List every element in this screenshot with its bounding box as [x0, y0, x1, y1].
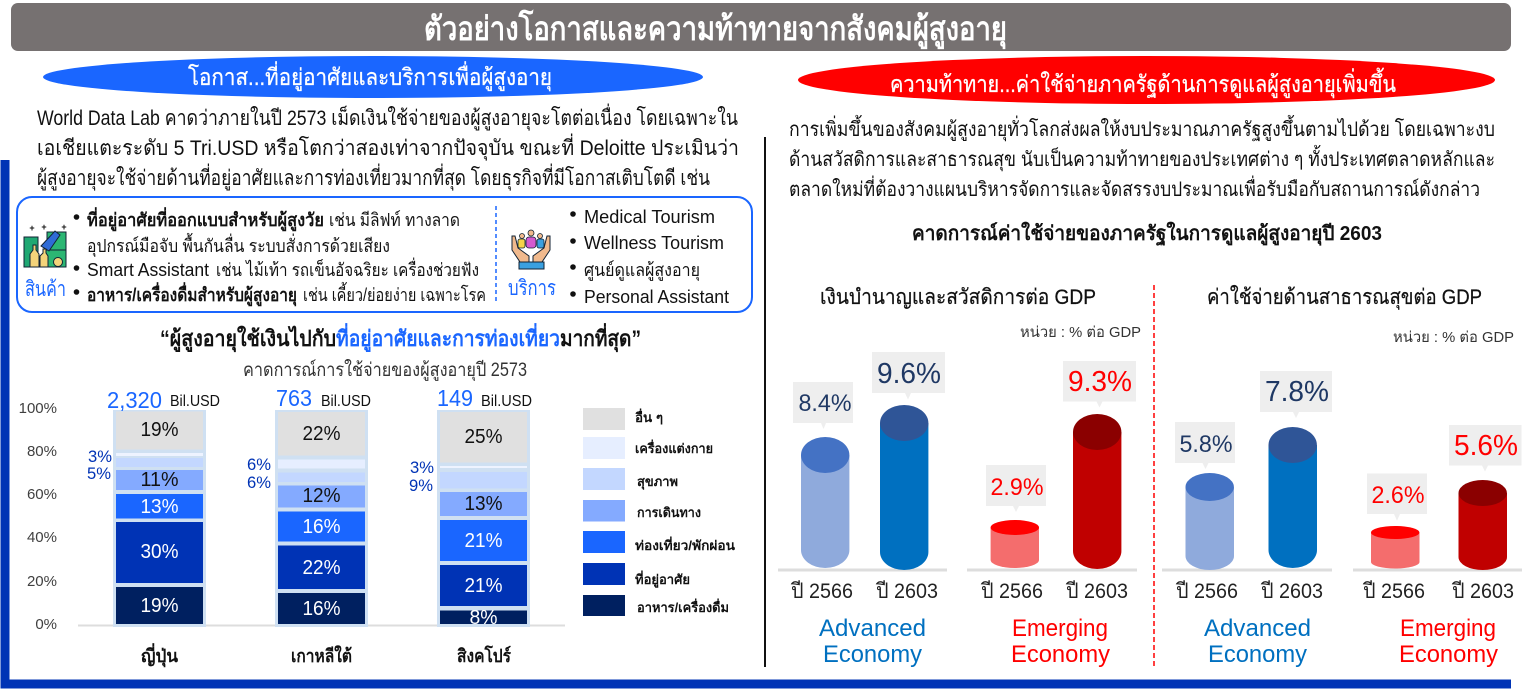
products and services box [17, 197, 752, 312]
y axis labels: 40% [27, 529, 57, 546]
opportunity paragraph: World Data Lab คาดว่าภายในปี 2573 เม็ดเงินใช้จ่ายของผู้สูงอายุจะโตต่อเนื่อง โดยเฉพาะใน [37, 103, 738, 131]
callout: 5.6%: 5.6% [1454, 430, 1518, 462]
icon: products: + [41, 222, 47, 232]
chart heading [160, 322, 641, 353]
market size labels: 2,320 [107, 387, 162, 413]
product list: เช่น ไม้เท้า รถเข็นอัจฉริยะ เครื่องช่วยฟัง [216, 257, 479, 280]
chart heading: “ผู้สูงอายุใช้เงินไปกับ [160, 325, 336, 353]
year labels: ปี 2566 [980, 580, 1043, 603]
legend: ที่อยู่อาศัย [635, 570, 690, 588]
market size labels: Bil.USD [481, 393, 532, 410]
year labels: ปี 2603 [1451, 580, 1514, 603]
panel: opportunity [17, 56, 752, 668]
stacked bar: Singapore: 13% [464, 493, 503, 515]
title bar [11, 3, 1511, 51]
chart heading: ที่อยู่อาศัยและการท่องเที่ยว [336, 322, 560, 353]
y axis labels [19, 400, 57, 633]
cylinder: Advanced 2566 health [1186, 473, 1234, 570]
market size labels: Bil.USD [170, 393, 220, 410]
economy labels: Emerging [1400, 615, 1496, 642]
chart heading: มากที่สุด” [560, 322, 641, 353]
legend: เครื่องแต่งกาย [635, 439, 713, 456]
service list [570, 207, 729, 307]
stacked bar: Singapore [437, 410, 530, 629]
cylinder: Advanced 2566 pension [801, 437, 849, 568]
callout: 5.6% [1449, 425, 1522, 472]
cylinder: Emerging 2603 pension [1073, 414, 1121, 569]
stacked bar: Japan: 13% [140, 496, 179, 518]
legend: อื่น ๆ [635, 408, 663, 425]
service list: Medical Tourism [584, 207, 715, 227]
callout: 9.3% [1063, 361, 1136, 408]
product list: เช่น มีลิฟท์ ทางลาด [329, 210, 460, 230]
stacked bar: Japan: 19% [140, 419, 179, 441]
cylinder: Emerging 2603 health [1458, 480, 1507, 570]
small side percentages [87, 447, 434, 495]
service list: Personal Assistant [584, 287, 729, 307]
stacked bar: Japan [113, 410, 206, 627]
unit note: pension: หน่วย : % ต่อ GDP [1020, 324, 1141, 341]
y axis labels: 60% [27, 486, 57, 503]
opportunity paragraph: ผู้สูงอายุจะใช้จ่ายด้านที่อยู่อาศัยและการท่องเที่ยวมากที่สุด โดยธุรกิจที่มีโอกาสเติบโตดี เช่น [37, 163, 710, 191]
country labels: ญี่ปุ่น [141, 643, 179, 668]
product list: อุปกรณ์มือจับ พื้นกันลื่น ระบบสั่งการด้วยเสียง [87, 233, 390, 257]
callout: 2.9% [986, 465, 1046, 512]
opportunity paragraph: เอเชียแตะระดับ 5 Tri.USD หรือโตกว่าสองเท่าจากปัจจุบัน ขณะที่ Deloitte ประเมินว่า [37, 133, 739, 161]
icon: products [24, 222, 67, 267]
market size labels: 763 [276, 385, 312, 411]
market size labels: 149 [437, 385, 473, 411]
economy labels [819, 615, 1498, 668]
legend [583, 408, 735, 616]
challenge paragraph [789, 115, 1495, 201]
legend: ท่องเที่ยว/พักผ่อน [635, 536, 735, 553]
service list: Wellness Tourism [584, 233, 724, 253]
callout: 9.6% [872, 352, 945, 400]
callout: 2.9%: 2.9% [990, 474, 1044, 501]
small side percentages: 3% [88, 447, 112, 466]
legend: การเดินทาง [637, 505, 701, 520]
label: services: บริการ [508, 277, 556, 300]
cylinder: Advanced 2603 pension [880, 405, 928, 570]
stacked bar: Japan: 30% [140, 541, 179, 563]
callout: 9.3%: 9.3% [1068, 366, 1132, 398]
stacked bar: Singapore: 8% [470, 607, 498, 629]
economy labels: Economy [1208, 641, 1307, 668]
product list: เช่น เคี้ยว/ย่อยง่าย เฉพาะโรค [303, 282, 486, 305]
year labels [790, 580, 1514, 603]
stacked bar: Korea: 22% [302, 423, 341, 445]
callout: 7.8% [1260, 371, 1332, 418]
stacked bar: Japan: 11% [140, 469, 179, 491]
title bar: ตัวอย่างโอกาสและความท้าทายจากสังคมผู้สูงอายุ [424, 9, 1007, 50]
callout: 9.6%: 9.6% [877, 358, 941, 390]
product list: ที่อยู่อาศัยที่ออกแบบสำหรับผู้สูงวัย [87, 207, 324, 232]
callout: 5.8% [1175, 422, 1235, 469]
economy labels: Emerging [1012, 615, 1108, 642]
small side percentages: 6% [247, 473, 271, 492]
heading: pension chart: เงินบำนาญและสวัสดิการต่อ GDP [820, 286, 1096, 309]
opportunity heading [43, 56, 703, 98]
country labels: สิงคโปร์ [457, 645, 511, 666]
product list [74, 207, 486, 307]
service list: ศูนย์ดูแลผู้สูงอายุ [584, 260, 700, 281]
y axis labels: 80% [27, 443, 57, 460]
legend: สุขภาพ [637, 474, 678, 490]
stacked bar: Korea: 16% [302, 598, 341, 620]
callout: 2.6%: 2.6% [1372, 482, 1424, 509]
icon: products: + [61, 222, 67, 232]
legend: อาหาร/เครื่องดื่ม [637, 598, 729, 615]
economy labels: Economy [1399, 641, 1498, 668]
country labels: เกาหลีใต้ [291, 645, 352, 666]
year labels: ปี 2566 [790, 580, 853, 603]
y axis labels: 100% [19, 400, 57, 417]
callout: 5.8%: 5.8% [1180, 431, 1232, 458]
challenge heading: ความท้าทาย...ค่าใช้จ่ายภาครัฐด้านการดูแลผู้สูงอายุเพิ่มขึ้น [890, 68, 1396, 98]
year labels: ปี 2566 [1175, 580, 1238, 603]
stacked bar: Korea: 12% [302, 485, 341, 507]
year labels: ปี 2566 [1362, 580, 1425, 603]
label: products: สินค้า [25, 278, 66, 301]
opportunity heading: โอกาส...ที่อยู่อาศัยและบริการเพื่อผู้สูงอายุ [188, 61, 552, 91]
stacked bar: Japan: 19% [140, 595, 179, 617]
panel: challenge [778, 56, 1522, 668]
blue frame of left panel [5, 160, 1511, 684]
callout: 8.4% [793, 382, 853, 429]
market size labels [107, 385, 532, 413]
chart subtitle: คาดการณ์การใช้จ่ายของผู้สูงอายุปี 2573 [243, 359, 527, 382]
small side percentages: 3% [410, 458, 434, 477]
product list: Smart Assistant [87, 260, 209, 280]
y axis labels: 20% [27, 573, 57, 590]
y axis labels: 0% [35, 616, 57, 633]
economy labels: Advanced [1204, 615, 1311, 642]
year labels: ปี 2603 [1065, 580, 1128, 603]
economy labels: Economy [1011, 641, 1110, 668]
country labels [141, 643, 511, 668]
cylinder: Emerging 2566 health [1371, 526, 1420, 569]
callout: 2.6% [1367, 474, 1427, 521]
product list: อาหาร/เครื่องดื่มสำหรับผู้สูงอายุ [87, 282, 297, 307]
cylinder: Emerging 2566 pension [991, 520, 1039, 568]
opportunity paragraph [37, 103, 739, 191]
heading: health chart: ค่าใช้จ่ายด้านสาธารณสุขต่อ GDP [1207, 285, 1482, 310]
year labels: ปี 2603 [875, 580, 938, 603]
stacked bar: Singapore: 25% [464, 426, 503, 448]
economy labels: Advanced [819, 615, 926, 642]
stacked bar: Singapore: 21% [464, 530, 503, 552]
economy labels: Economy [823, 641, 922, 668]
stacked bar: Korea: 16% [302, 516, 341, 538]
icon: products: + [29, 223, 35, 233]
cylinder: Advanced 2603 health [1268, 427, 1317, 568]
unit note: health: หน่วย : % ต่อ GDP [1393, 329, 1514, 346]
callout: 8.4%: 8.4% [798, 390, 852, 417]
market size labels: Bil.USD [321, 393, 371, 410]
stacked bar: Korea: 22% [302, 557, 341, 579]
stacked bar: Singapore: 21% [464, 575, 503, 597]
callout: 7.8%: 7.8% [1265, 376, 1329, 408]
small side percentages: 9% [409, 476, 433, 495]
stacked bar: Korea [275, 410, 368, 627]
forecast title: คาดการณ์ค่าใช้จ่ายของภาครัฐในการดูแลผู้สูงอายุปี 2603 [912, 221, 1382, 247]
challenge heading [798, 56, 1495, 104]
icon: services [512, 230, 550, 269]
small side percentages: 6% [247, 455, 271, 474]
year labels: ปี 2603 [1260, 580, 1323, 603]
small side percentages: 5% [87, 464, 111, 483]
